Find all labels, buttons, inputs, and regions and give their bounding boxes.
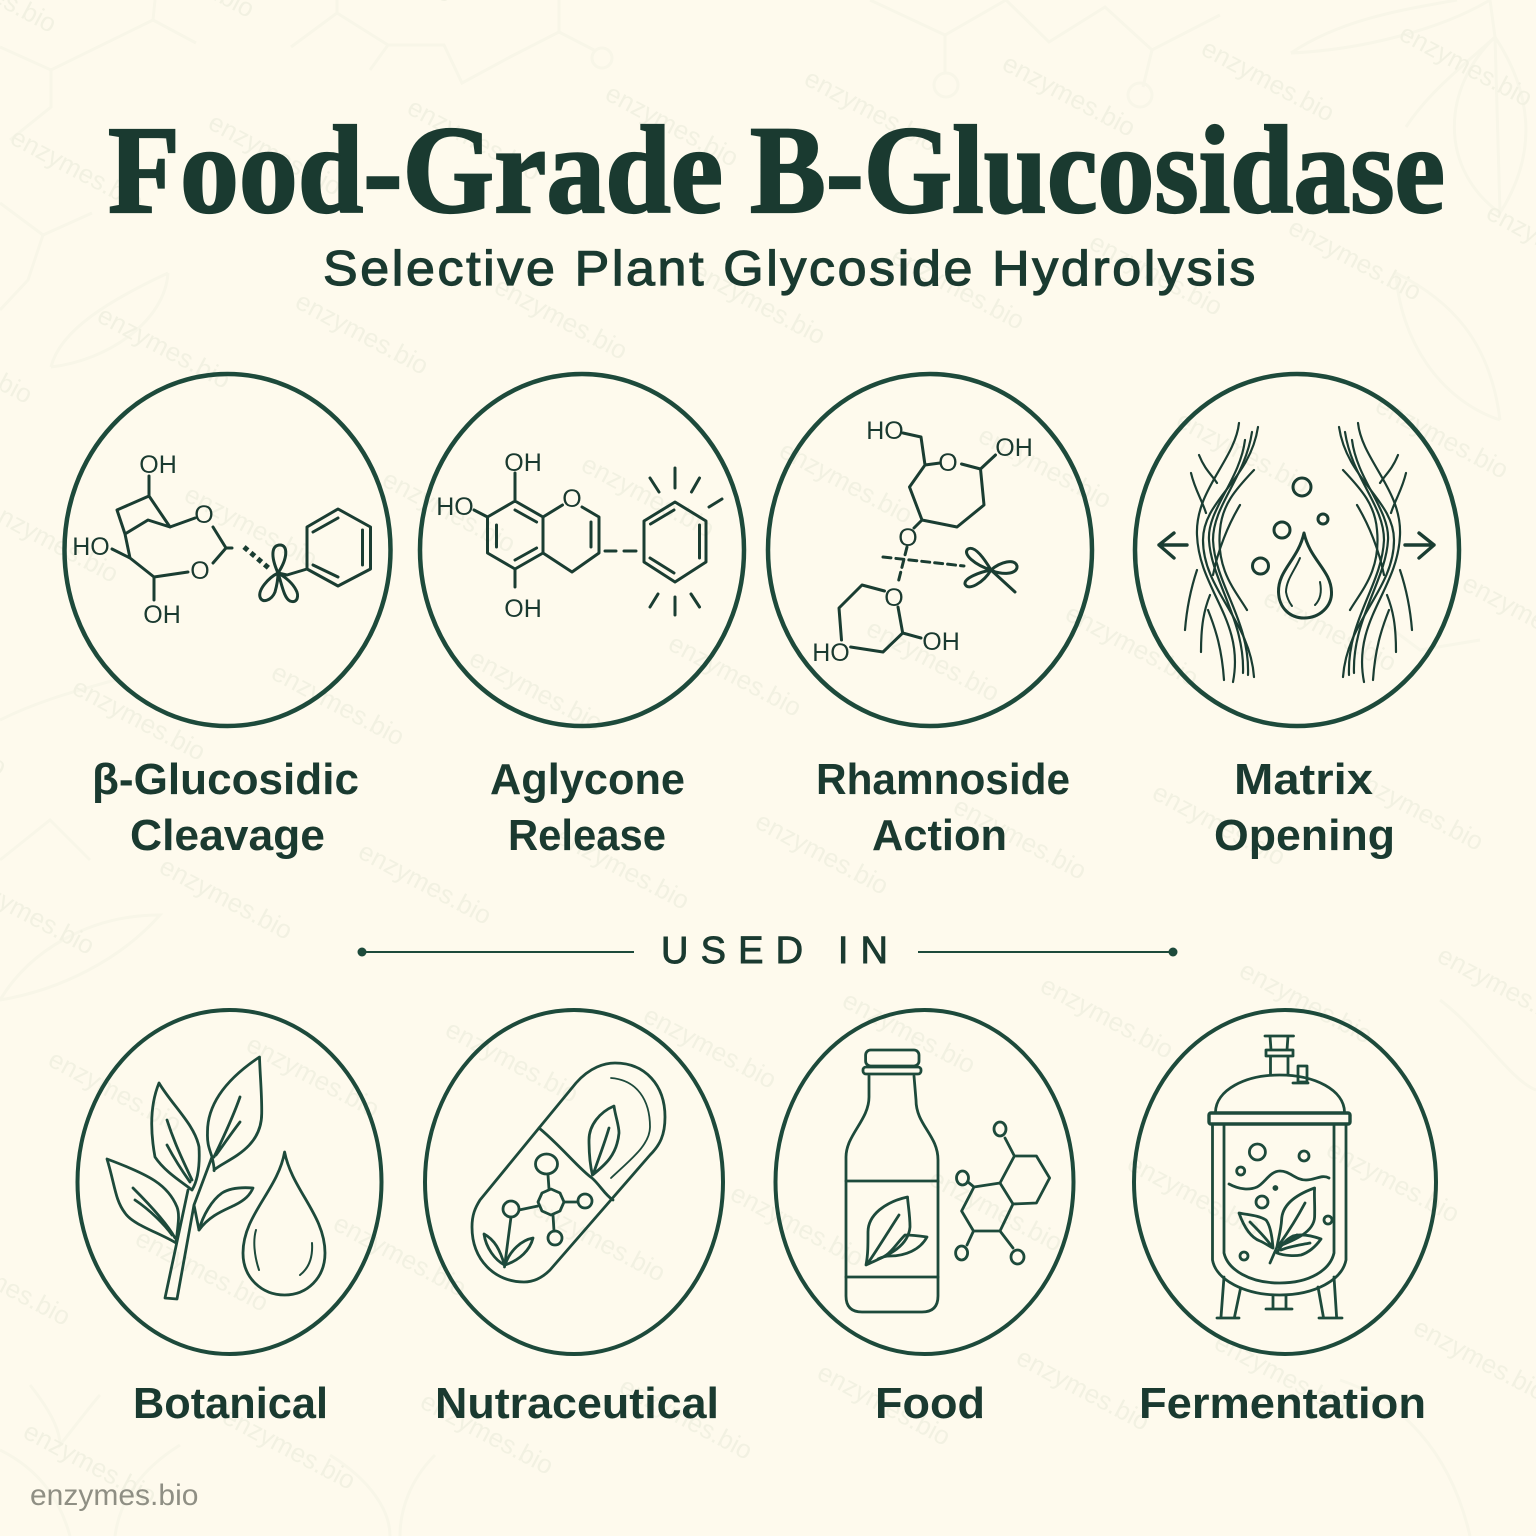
watermark pattern: enzymes.bio: [204, 107, 347, 202]
title: B-Glucosidase: [750, 102, 1445, 240]
watermark pattern: enzymes.bio: [887, 241, 1030, 336]
watermark pattern: enzymes.bio: [552, 821, 695, 916]
label: Cleavage: [130, 811, 325, 860]
watermark pattern: enzymes.bio: [155, 851, 298, 946]
watermark pattern: enzymes.bio: [180, 479, 323, 574]
label: β-Glucosidic: [92, 755, 359, 804]
circle: [425, 1010, 723, 1354]
panel: food: [776, 1010, 1074, 1428]
label: [490, 755, 685, 860]
icon: bottle and molecule: [846, 1050, 1050, 1312]
icon: linked sugars with scissors: OH: [995, 434, 1033, 462]
watermark pattern: enzymes.bio: [775, 435, 918, 530]
title: [108, 102, 1445, 240]
icon: flavonoid with glowing ring: O: [562, 485, 582, 513]
watermark pattern: enzymes.bio: [601, 78, 744, 173]
circle: [776, 1010, 1074, 1354]
icon: linked sugars with scissors: OH: [922, 628, 960, 656]
icon: flavonoid with glowing ring: HO: [436, 493, 474, 521]
label: [1214, 755, 1395, 860]
watermark pattern: enzymes.bio: [1061, 598, 1204, 693]
watermark pattern: enzymes.bio: [242, 1029, 385, 1124]
watermark pattern: enzymes.bio: [800, 63, 943, 158]
watermark pattern: enzymes.bio: [131, 1223, 274, 1318]
icon: sugar ring with scissors and phenyl: O: [190, 557, 210, 585]
watermark pattern: enzymes.bio: [813, 1357, 956, 1452]
icon: linked sugars with scissors: HO: [812, 639, 850, 667]
icon: fermentation tank: [1209, 1036, 1350, 1318]
label: Aglycone: [490, 755, 685, 804]
watermark pattern: enzymes.bio: [1346, 762, 1489, 857]
watermark pattern: enzymes.bio: [862, 613, 1005, 708]
label: Action: [872, 811, 1007, 860]
icon: fibres parting around drop: [1159, 423, 1434, 682]
watermark pattern: enzymes.bio: [688, 256, 831, 351]
watermark pattern: enzymes.bio: [1148, 777, 1291, 872]
watermark pattern: enzymes.bio: [577, 449, 720, 544]
watermark pattern: enzymes.bio: [465, 643, 608, 738]
watermark pattern: enzymes.bio: [664, 628, 807, 723]
icon: linked sugars with scissors: O: [938, 449, 958, 477]
watermark pattern: enzymes.bio: [6, 122, 149, 217]
watermark pattern: enzymes.bio: [1085, 227, 1228, 322]
panel: nutraceutical: [425, 1010, 723, 1428]
circle: [64, 374, 390, 726]
label: Matrix: [1234, 755, 1374, 804]
watermark pattern: enzymes.bio: [93, 300, 236, 395]
panel: botanical: [78, 1010, 382, 1428]
icon: sugar ring with scissors and phenyl: OH: [139, 451, 177, 479]
watermark pattern: enzymes.bio: [1036, 970, 1179, 1065]
watermark pattern: enzymes.bio: [416, 1386, 559, 1481]
icon: linked sugars with scissors: [812, 417, 1033, 667]
watermark pattern: enzymes.bio: [838, 985, 981, 1080]
label: Release: [508, 811, 666, 860]
label: Nutraceutical: [435, 1379, 719, 1428]
watermark pattern: enzymes.bio: [291, 286, 434, 381]
watermark pattern: enzymes.bio: [949, 791, 1092, 886]
icon: linked sugars with scissors: O: [884, 584, 904, 612]
icon: capsule with molecule and leaf: [472, 1063, 665, 1282]
divider: used in: [358, 930, 1178, 972]
watermark pattern: enzymes.bio: [378, 464, 521, 559]
watermark pattern: enzymes.bio: [1284, 212, 1427, 307]
watermark pattern: enzymes.bio: [1172, 405, 1315, 500]
watermark pattern: enzymes.bio: [267, 657, 410, 752]
icon: sugar ring with scissors and phenyl: OH: [143, 601, 181, 629]
watermark pattern: enzymes.bio: [1012, 1342, 1155, 1437]
watermark pattern: enzymes.bio: [1371, 390, 1514, 485]
circle: [768, 374, 1092, 726]
label: [92, 755, 359, 860]
watermark pattern: enzymes.bio: [403, 92, 546, 187]
label: Opening: [1214, 811, 1395, 860]
panel: rhamnoside action: [768, 374, 1092, 860]
watermark pattern: enzymes.bio: [528, 1193, 671, 1288]
panel: beta-glucosidic cleavage: [64, 374, 390, 860]
watermark pattern: enzymes.bio: [1123, 1148, 1266, 1243]
watermark pattern: enzymes.bio: [1197, 33, 1340, 128]
watermark pattern: enzymes.bio: [1395, 18, 1536, 113]
watermark pattern: enzymes.bio: [726, 1178, 869, 1273]
watermark pattern: enzymes.bio: [354, 836, 497, 931]
watermark pattern: enzymes.bio: [998, 48, 1141, 143]
watermark pattern: enzymes.bio: [441, 1014, 584, 1109]
title: Food-Grade: [108, 102, 723, 240]
icon: flavonoid with glowing ring: OH: [504, 449, 542, 477]
watermark pattern: enzymes.bio: [68, 672, 211, 767]
label: Rhamnoside: [816, 755, 1070, 804]
watermark pattern: enzymes.bio: [1235, 955, 1378, 1050]
circle: [78, 1010, 382, 1354]
watermark pattern: enzymes.bio: [1210, 1327, 1353, 1422]
icon: linked sugars with scissors: HO: [866, 417, 904, 445]
panel: matrix opening: [1135, 374, 1459, 860]
panel: fermentation: [1134, 1010, 1436, 1428]
watermark pattern: enzymes.bio: [329, 1208, 472, 1303]
watermark pattern: enzymes.bio: [615, 1371, 758, 1466]
watermark pattern: enzymes.bio: [218, 1401, 361, 1496]
icon: flavonoid with glowing ring: [436, 449, 722, 623]
icon: sugar ring with scissors and phenyl: [72, 451, 370, 629]
panel: aglycone release: [420, 374, 744, 860]
watermark pattern: enzymes.bio: [751, 806, 894, 901]
watermark pattern: enzymes.bio: [19, 1416, 162, 1511]
watermark pattern: enzymes.bio: [490, 271, 633, 366]
circle: [420, 374, 744, 726]
watermark pattern: enzymes.bio: [1259, 583, 1402, 678]
watermark pattern: enzymes.bio: [925, 1163, 1068, 1258]
watermark pattern: enzymes.bio: [974, 420, 1117, 515]
icon: sugar ring with scissors and phenyl: HO: [72, 533, 110, 561]
subtitle: Selective Plant Glycoside Hydrolysis: [323, 242, 1258, 296]
label: Food: [875, 1379, 985, 1428]
divider: used in: USED IN: [661, 930, 888, 972]
circle: [1134, 1010, 1436, 1354]
label: Fermentation: [1139, 1379, 1426, 1428]
icon: sugar ring with scissors and phenyl: O: [194, 501, 214, 529]
label: Botanical: [133, 1379, 328, 1428]
watermark pattern: enzymes.bio: [1322, 1134, 1465, 1229]
circle: [1135, 374, 1459, 726]
watermark pattern: enzymes.bio: [44, 1044, 187, 1139]
label: [816, 755, 1070, 860]
icon: flavonoid with glowing ring: OH: [504, 595, 542, 623]
watermark pattern: enzymes.bio: [639, 1000, 782, 1095]
icon: linked sugars with scissors: O: [898, 524, 918, 552]
footer brand: enzymes.bio: [30, 1479, 198, 1512]
icon: leafy sprig and drop: [107, 1057, 325, 1299]
